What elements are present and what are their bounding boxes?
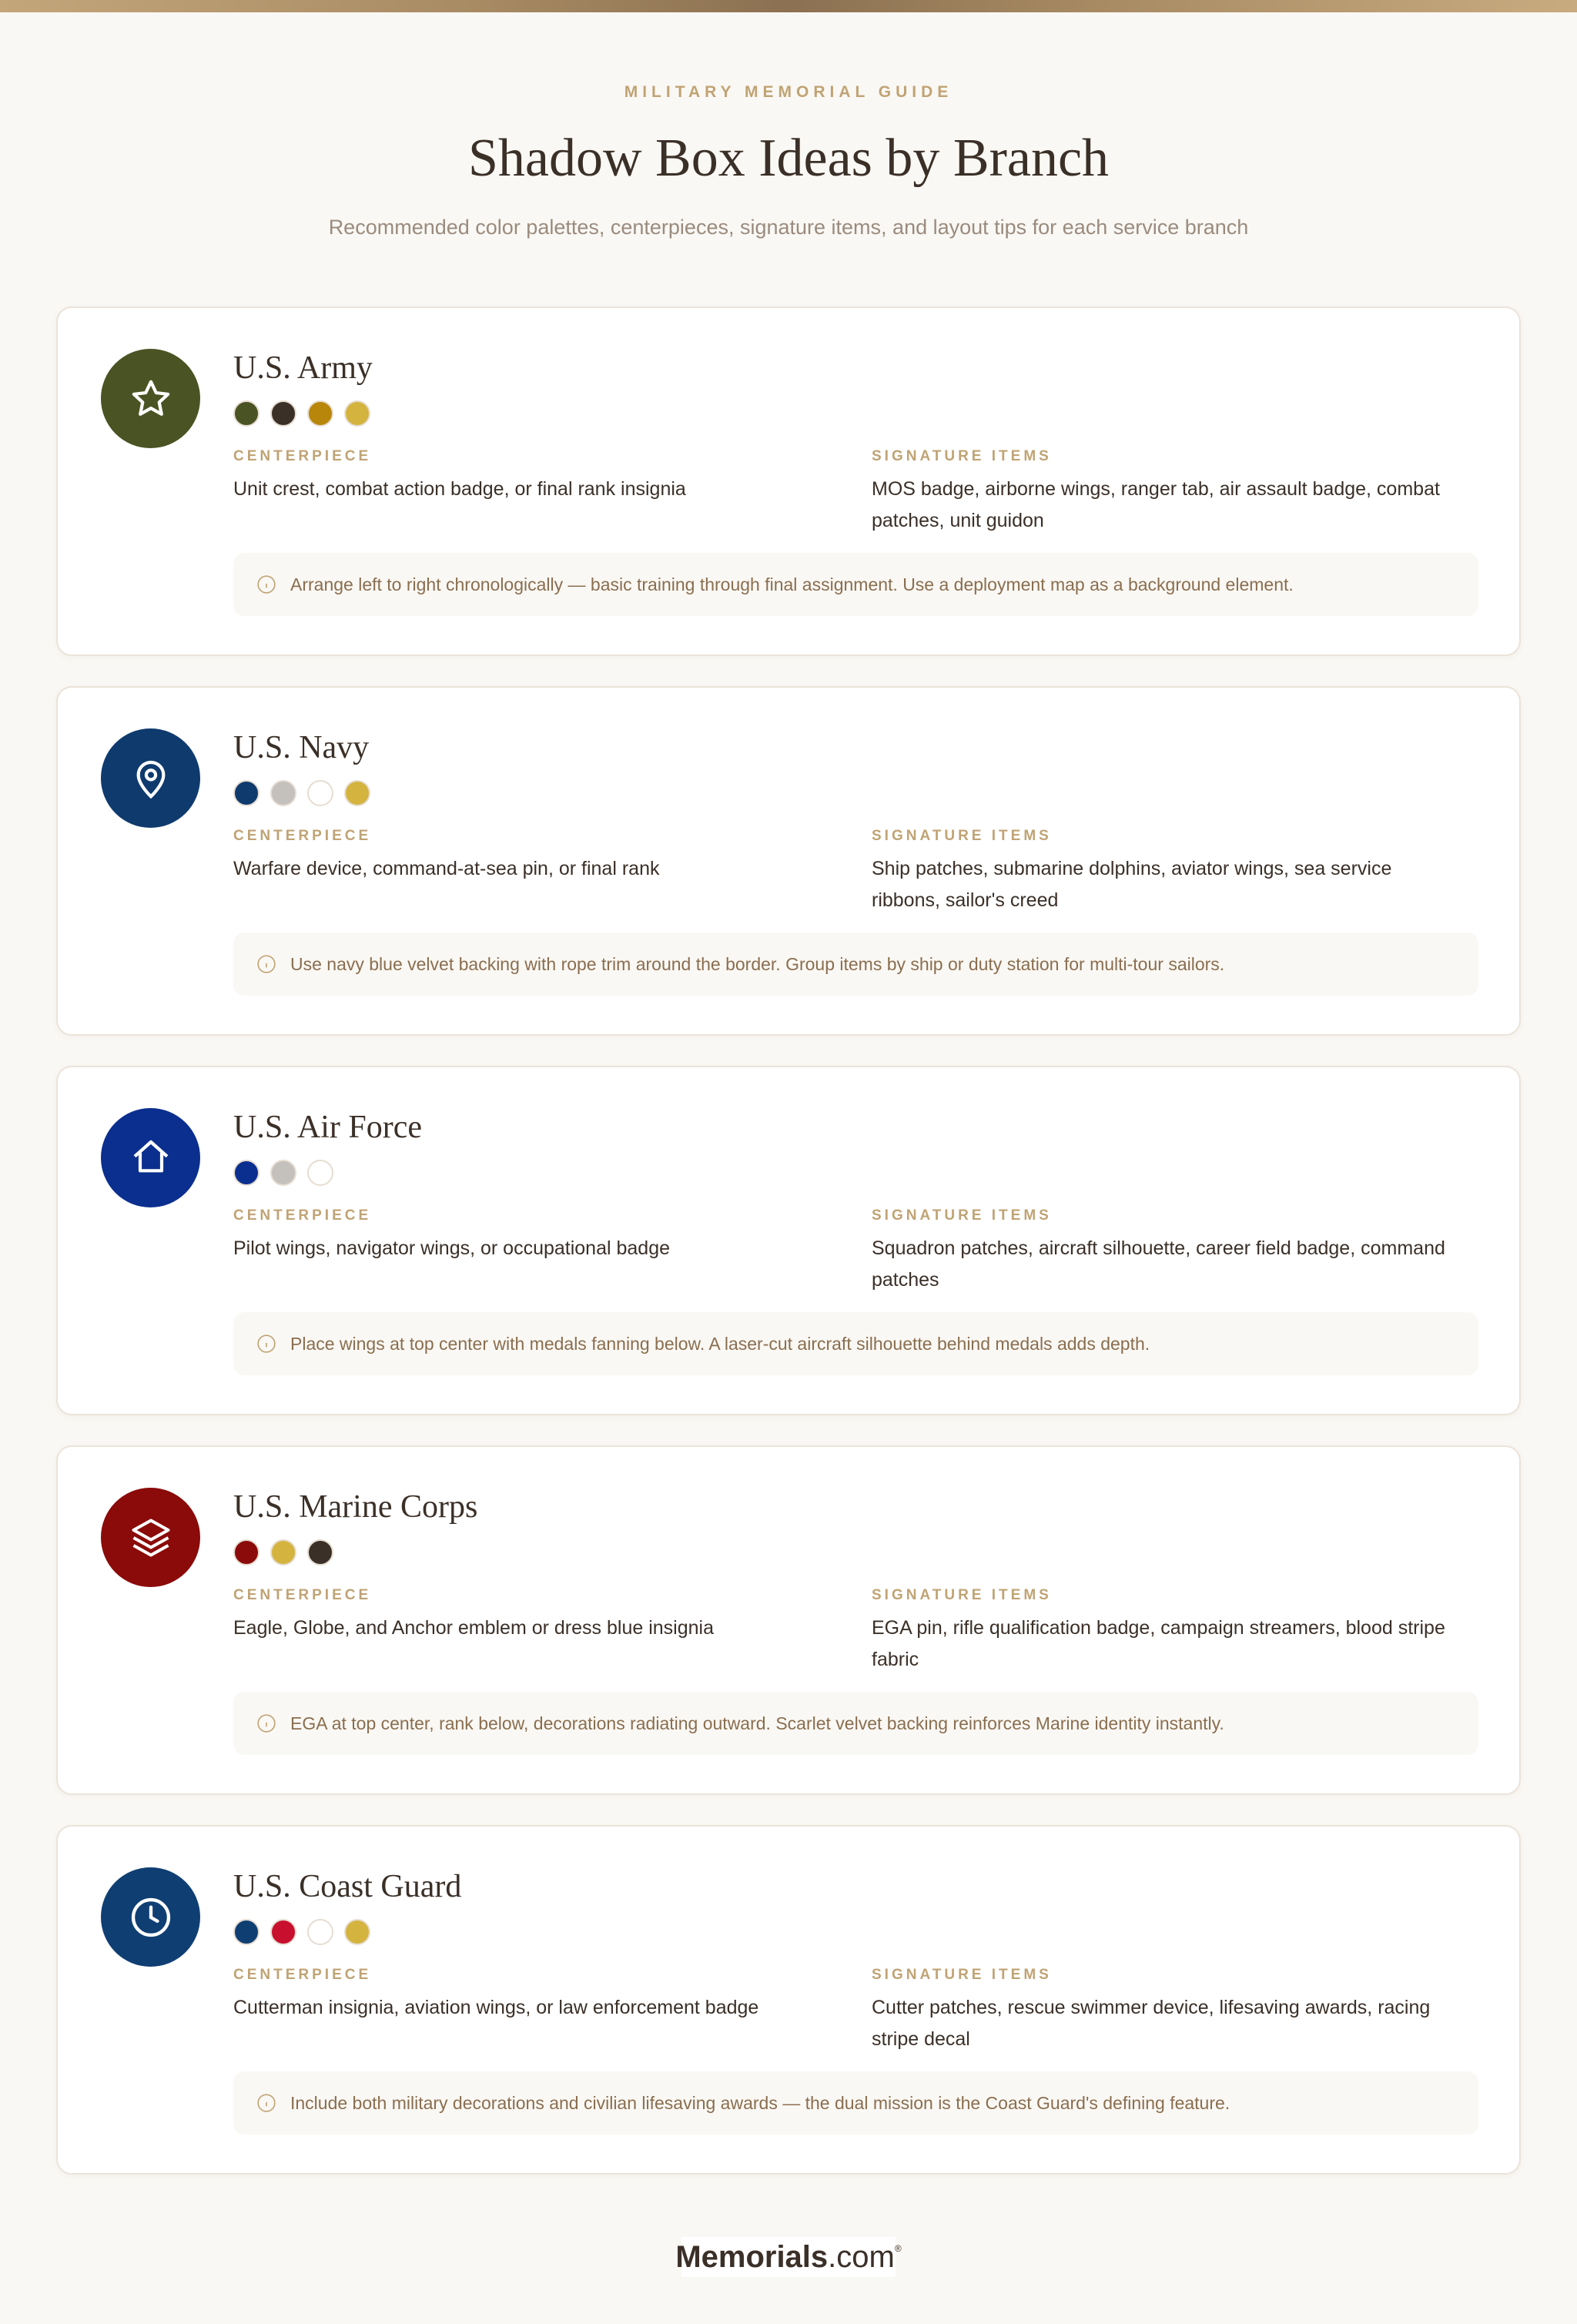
signature label: SIGNATURE ITEMS — [872, 1207, 1052, 1224]
tip — [233, 933, 1478, 996]
title: Shadow Box Ideas by Branch — [468, 129, 1109, 188]
signature text: Ship patches, submarine dolphins, aviator wings, sea service ribbons, sailor's creed — [872, 858, 1391, 911]
tip — [233, 553, 1478, 616]
palette — [233, 780, 370, 806]
panel: coast guard — [56, 1825, 1521, 2175]
panel: army — [56, 306, 1521, 656]
palette — [233, 1919, 370, 1945]
tip: Include both military decorations and civilian lifesaving awards — the dual mission is the Coast Guard's defining feature. — [290, 2093, 1230, 2113]
centerpiece label: CENTERPIECE — [233, 828, 371, 844]
signature text: Squadron patches, aircraft silhouette, career field badge, command patches — [872, 1237, 1445, 1291]
palette — [233, 1539, 333, 1566]
subtitle: Recommended color palettes, centerpieces, signature items, and layout tips for each service branch — [329, 216, 1248, 239]
heading: U.S. Army — [233, 350, 373, 386]
signature text: EGA pin, rifle qualification badge, campaign streamers, blood stripe fabric — [872, 1617, 1445, 1670]
icon: layers — [101, 1488, 200, 1587]
tip: Use navy blue velvet backing with rope trim around the border. Group items by ship or duty station for multi-tour sailors. — [290, 953, 1224, 973]
centerpiece text: Cutterman insignia, aviation wings, or law enforcement badge — [233, 1997, 758, 2018]
tip: Arrange left to right chronologically — basic training through final assignment. Use a deployment map as a background element. — [290, 574, 1294, 594]
text: ® — [895, 2243, 902, 2254]
signature text: MOS badge, airborne wings, ranger tab, air assault badge, combat patches, unit guidon — [872, 478, 1440, 531]
centerpiece text: Warfare device, command-at-sea pin, or final rank — [233, 858, 659, 879]
palette — [233, 1160, 333, 1186]
tip — [233, 1692, 1478, 1755]
centerpiece label: CENTERPIECE — [233, 1207, 371, 1224]
heading: U.S. Coast Guard — [233, 1869, 461, 1904]
logo: .com — [828, 2239, 895, 2273]
eyebrow: MILITARY MEMORIAL GUIDE — [624, 83, 953, 101]
logo — [681, 2237, 896, 2277]
centerpiece label: CENTERPIECE — [233, 1587, 371, 1603]
signature label: SIGNATURE ITEMS — [872, 828, 1052, 844]
logo: Memorials — [675, 2239, 828, 2273]
tip — [233, 1312, 1478, 1375]
tip — [233, 2071, 1478, 2135]
signature text: Cutter patches, rescue swimmer device, lifesaving awards, racing stripe decal — [872, 1997, 1430, 2050]
heading: U.S. Navy — [233, 730, 369, 765]
icon: map pin — [101, 728, 200, 828]
tip: EGA at top center, rank below, decorations radiating outward. Scarlet velvet backing reinforces Marine identity instantly. — [290, 1713, 1224, 1733]
centerpiece text: Pilot wings, navigator wings, or occupational badge — [233, 1237, 670, 1259]
panel: air force — [56, 1066, 1521, 1415]
signature label: SIGNATURE ITEMS — [872, 448, 1052, 464]
centerpiece label: CENTERPIECE — [233, 448, 371, 464]
centerpiece text: Unit crest, combat action badge, or final rank insignia — [233, 478, 686, 500]
centerpiece text: Eagle, Globe, and Anchor emblem or dress blue insignia — [233, 1617, 714, 1639]
icon: star — [101, 349, 200, 448]
centerpiece label: CENTERPIECE — [233, 1967, 371, 1983]
panel: navy — [56, 686, 1521, 1036]
icon: clock — [101, 1867, 200, 1967]
heading: U.S. Marine Corps — [233, 1489, 477, 1525]
icon: home — [101, 1108, 200, 1207]
signature label: SIGNATURE ITEMS — [872, 1587, 1052, 1603]
palette — [233, 400, 370, 427]
panel: marine corps — [56, 1445, 1521, 1795]
heading: U.S. Air Force — [233, 1110, 422, 1145]
tip: Place wings at top center with medals fanning below. A laser-cut aircraft silhouette behind medals adds depth. — [290, 1334, 1150, 1354]
signature label: SIGNATURE ITEMS — [872, 1967, 1052, 1983]
